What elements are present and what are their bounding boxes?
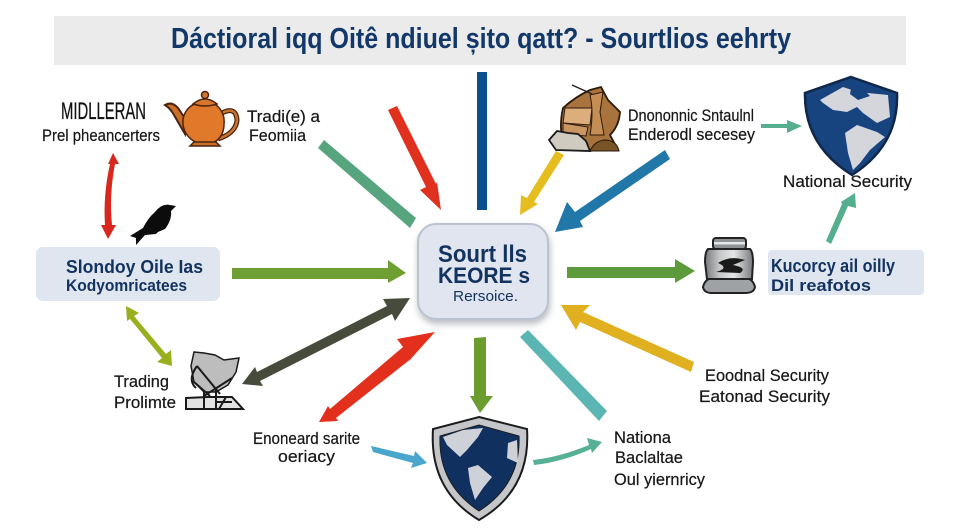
arrow: green curved from bottom shield xyxy=(533,438,602,465)
arrow: red double arrow xyxy=(319,332,435,422)
arrow: teal bar xyxy=(520,330,607,421)
text: Trading a Premium: Feomiia xyxy=(249,127,307,145)
arrow: green from left box to center xyxy=(232,260,406,283)
text: Middle Eastern producers: Prel pheancerters xyxy=(42,127,160,145)
arrow: small green to shield xyxy=(761,120,802,133)
icon: top right shield xyxy=(805,77,897,175)
text: Enhanced energy: Enoneard sarite xyxy=(253,430,360,448)
arrow: olive double arrow xyxy=(126,306,172,366)
arrow: dark double arrow xyxy=(242,298,410,386)
icon: brown rock pile figure xyxy=(549,85,620,151)
text: Trading a Premium: Tradi(e) a xyxy=(247,108,321,126)
arrow: green up to National Security xyxy=(826,193,856,244)
arrow: green bar from top left xyxy=(318,140,416,228)
text: Trading a Premium xyxy=(247,108,321,145)
panel: left box: Kodyomricatees xyxy=(66,277,187,295)
text: National Oil Security: Baclaltae xyxy=(615,449,683,467)
panel: left box xyxy=(36,247,220,301)
text: Trading Profile xyxy=(114,373,176,412)
text: Economic and National Security: Eatonad Security xyxy=(699,388,831,406)
icon: globe on stand xyxy=(186,352,243,409)
text: Economic and National Security: Eoodnal Security xyxy=(705,367,830,385)
text: Enhanced energy: oeriacy xyxy=(278,448,336,466)
text: Middle Eastern producers: MIDLLERAN xyxy=(61,98,146,125)
arrow: red vertical double arrow xyxy=(101,153,119,239)
text: Economic Security Energy xyxy=(628,107,756,144)
panel: left box: Slondoy Oile Ias xyxy=(66,257,203,277)
title banner xyxy=(54,16,906,65)
panel: right box: Kucorcy ail oilly xyxy=(771,256,895,276)
text: National Security: National Security xyxy=(783,173,913,191)
text: National Oil Security xyxy=(614,429,706,489)
title banner: Dáctioral iqq Oitê ndiuel șito qatt? - Sourtlios eehrty xyxy=(171,23,791,55)
arrow: blue vertical bar xyxy=(477,72,487,210)
arrow: red top into center xyxy=(388,106,441,210)
text: Trading Profile: Trading xyxy=(114,373,169,391)
text: Economic Security Energy: Dnononnic Sntaulnl xyxy=(628,107,754,125)
panel: right box: Dil reafotos xyxy=(771,276,871,295)
icon: teapot xyxy=(165,92,237,146)
arrow: yellow into center xyxy=(520,151,564,215)
panel: right box xyxy=(768,250,924,295)
center card: South Korea's Resources xyxy=(418,224,548,319)
arrow: small blue to bottom shield xyxy=(371,446,427,468)
arrow: blue diagonal into center xyxy=(555,150,670,232)
icon: silver tin xyxy=(703,238,755,293)
text: Economic and National Security xyxy=(699,367,831,406)
center card: South Korea's Resources: Sourt lls xyxy=(438,241,527,268)
text: National Oil Security: Oul yiernricy xyxy=(614,471,706,489)
arrow: green right to tin xyxy=(567,259,695,283)
text: Middle Eastern producers xyxy=(42,98,160,145)
arrow: green down to bottom shield xyxy=(470,337,493,413)
text: Economic Security Energy: Enderodl secesey xyxy=(628,126,756,144)
text: Trading Profile: Prolimte xyxy=(114,394,176,412)
center card: South Korea's Resources: KEORE s xyxy=(438,263,530,288)
icon: black bird xyxy=(130,205,176,245)
center card: South Korea's Resources: Rersoice. xyxy=(453,288,518,305)
arrow: gold into center xyxy=(561,305,694,372)
icon: bottom shield xyxy=(433,417,527,520)
text: National Oil Security: Nationa xyxy=(614,429,672,447)
text: Enhanced energy xyxy=(253,430,360,466)
